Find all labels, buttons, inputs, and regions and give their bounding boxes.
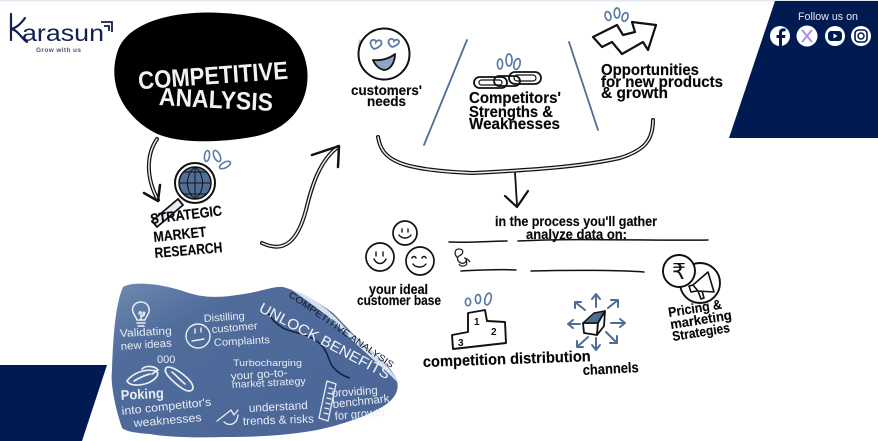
icon: distribution channels — [568, 294, 625, 350]
label: competitors' strengths and weaknesses: Competitors' — [469, 90, 561, 107]
text: providing benchmark — [331, 385, 390, 423]
label: pricing and marketing strategies: Strategies — [671, 320, 731, 344]
label: customers' needs — [351, 82, 422, 109]
arrow: title to market research — [144, 139, 160, 201]
text: understand trends: understand — [249, 400, 308, 415]
label: strategic market research: STRATEGIC — [150, 203, 223, 228]
text: distilling complaints: Distilling — [203, 310, 245, 325]
text: poking: weaknesses — [132, 412, 202, 430]
heading: unlock benefits: UNLOCK BENEFITS — [256, 300, 393, 383]
title line 1: COMPETITIVE — [137, 57, 289, 95]
icon: ruler — [319, 381, 336, 421]
label: opportunities: & growth — [601, 85, 668, 102]
text: understand trends — [243, 400, 314, 428]
text: in the process — [495, 213, 657, 242]
label: your ideal customer base: customer base — [357, 292, 441, 308]
label: your ideal customer base — [357, 281, 441, 308]
text: turbocharging: Turbocharging — [233, 358, 302, 369]
text: poking: Poking — [120, 385, 164, 403]
icon: trend — [217, 410, 238, 424]
text: turbocharging: market strategy — [232, 376, 306, 391]
text: poking: into competitor's — [121, 397, 212, 418]
text: validating new ideas — [120, 325, 173, 353]
arrow: research to outcomes — [262, 146, 339, 247]
brace: outcomes converge — [378, 120, 653, 207]
icon: podium — [452, 292, 506, 349]
icon: podium: 1 — [474, 317, 480, 328]
curve inside blob — [268, 313, 350, 378]
label: customers' needs: customers' — [351, 82, 422, 98]
text: in the process: analyze data on: — [526, 226, 627, 242]
icon: instagram — [851, 26, 871, 46]
icon: youtube — [825, 26, 845, 46]
label: competition distribution: competition distribution — [423, 348, 591, 371]
label: opportunities: for new products — [601, 74, 723, 91]
icon: facebook — [770, 26, 790, 46]
icon: rupee and megaphone: ₹ — [672, 259, 686, 284]
text: distilling complaints — [203, 310, 270, 349]
text: follow us on: Follow us on — [798, 11, 858, 23]
icon: heart eyes face — [358, 28, 410, 80]
divider: right — [569, 42, 598, 130]
icon: x — [796, 26, 818, 46]
panel: follow us corner — [729, 1, 878, 138]
text: turbocharging — [230, 358, 306, 391]
text: distilling complaints: Complaints — [214, 334, 270, 349]
title blob — [114, 13, 308, 141]
text: providing benchmark: for growth — [334, 407, 385, 423]
icon: rupee and megaphone — [663, 255, 720, 303]
text: understand trends: trends & risks — [243, 414, 314, 428]
label: competitors' strengths and weaknesses — [469, 90, 561, 133]
text: in the process: in the process you'll gather — [495, 213, 657, 229]
label: channels: channels — [582, 360, 639, 379]
icon: broken chain — [127, 366, 193, 391]
label: strategic market research: RESEARCH — [154, 240, 223, 262]
text: providing benchmark: providing — [331, 385, 378, 400]
icon: sparks — [204, 149, 232, 170]
label: customers' needs: needs — [367, 93, 406, 109]
panel: bottom left corner — [0, 365, 107, 441]
text: validating new ideas: new ideas — [120, 337, 173, 353]
icon: neutral face — [186, 324, 210, 348]
text: poking — [120, 385, 212, 430]
label: strategic market research — [150, 203, 223, 262]
label: opportunities: Opportunities — [601, 62, 699, 79]
panel: unlock benefits blob — [112, 284, 398, 437]
text: providing benchmark: benchmark — [332, 393, 390, 411]
text: tagline: Grow with us — [36, 47, 81, 54]
label: pricing and marketing strategies: marketing — [669, 307, 733, 332]
label: competitors' strengths and weaknesses: Strengths & — [469, 104, 553, 121]
icon: chain links — [474, 54, 541, 88]
divider: left — [424, 40, 467, 145]
icon: podium: 2 — [491, 327, 497, 338]
text: competitive analysis: COMPETITIVE ANALYSIS — [287, 289, 396, 370]
text: validating new ideas: Validating — [120, 325, 172, 340]
label: opportunities — [601, 62, 723, 102]
text: distilling complaints: customer — [211, 320, 259, 336]
icon: magnifying globe — [152, 149, 232, 227]
label: pricing and marketing strategies: Pricing & — [667, 297, 723, 320]
icon: podium: 3 — [458, 338, 464, 349]
hand-drawn lines — [449, 240, 708, 272]
icon: growth arrow — [593, 8, 656, 54]
text: dots: 000 — [157, 354, 175, 366]
title line 2: ANALYSIS — [158, 83, 274, 117]
icon: three faces — [366, 221, 434, 275]
icon: light bulb — [133, 302, 149, 326]
label: your ideal customer base: your ideal — [369, 281, 428, 297]
logo: karasun — [11, 14, 112, 54]
label: strategic market research: MARKET — [153, 225, 207, 246]
label: competitors' strengths and weaknesses: Weaknesses — [469, 116, 560, 133]
label: pricing and marketing strategies — [667, 297, 733, 344]
text: turbocharging: your go-to- — [230, 367, 288, 383]
logo: karasun: arasun — [22, 20, 104, 46]
